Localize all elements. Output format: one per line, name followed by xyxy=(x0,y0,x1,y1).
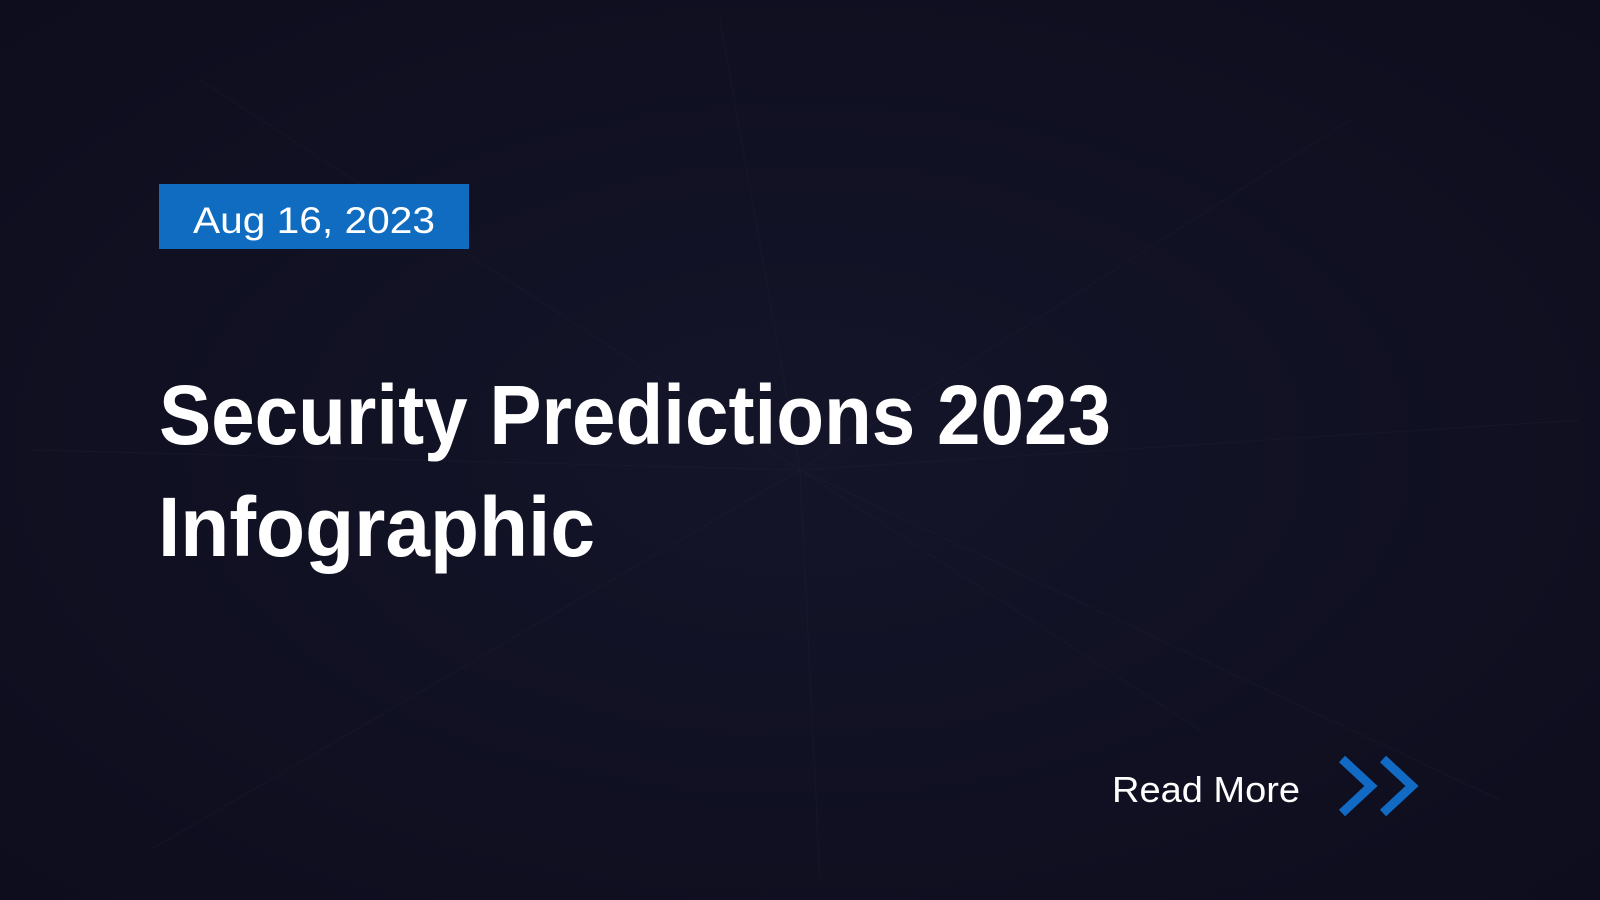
read more link xyxy=(1112,759,1412,813)
title xyxy=(158,368,1111,574)
date badge xyxy=(159,184,469,249)
title: Infographic xyxy=(158,480,595,574)
date badge: Aug 16, 2023 xyxy=(193,200,435,241)
read more link: Read More xyxy=(1112,769,1300,810)
title: Security Predictions 2023 xyxy=(159,368,1111,462)
icon: double chevron arrow xyxy=(1342,759,1412,813)
